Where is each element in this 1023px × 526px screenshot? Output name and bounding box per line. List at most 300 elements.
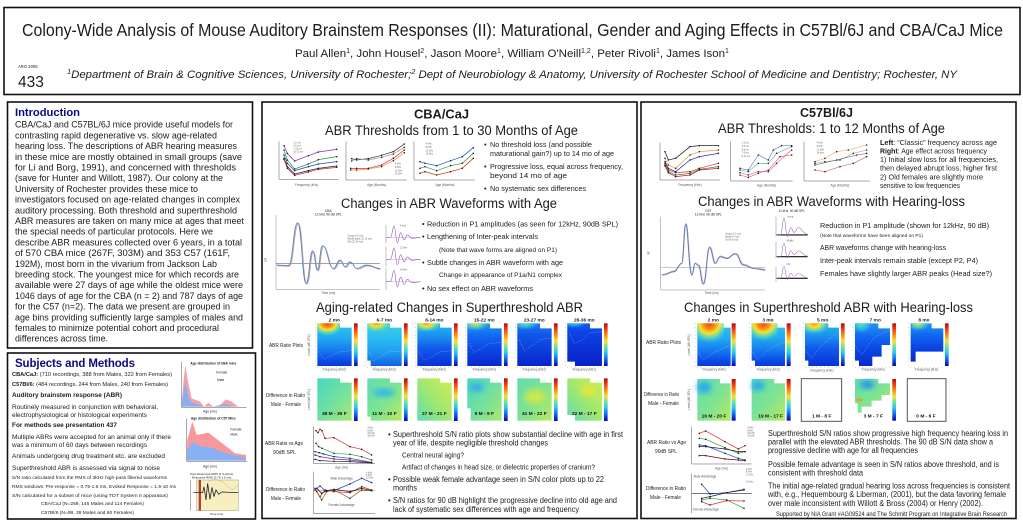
chart: ABR ratio vs age: 8 kHz xyxy=(367,430,374,432)
text block: methods: C57Bl/6: (484 recordings, 244 from Males, 240 from Females) xyxy=(12,382,168,388)
heatmaps: CBA difference plots: Level (dB SPL) xyxy=(307,389,311,410)
row labels: C57: Difference in Ratio xyxy=(646,486,686,492)
row labels: C57 xyxy=(644,340,686,501)
heatmap: 8 mo: 8 mo xyxy=(918,317,930,323)
poster label: ARO 2005 xyxy=(18,64,38,69)
difference plot: 27 M - 21 F xyxy=(417,378,458,421)
chart: threshold by age, males: 7-8 mo xyxy=(742,153,750,155)
text block: introduction xyxy=(15,119,244,344)
text block: introduction: contrasting rapid degenerative vs. slow age-related xyxy=(15,129,217,140)
chart: age distribution of C57 mice: Male xyxy=(230,432,238,436)
text block: threshold notes: maturational gain?) up to 14 mo of age xyxy=(490,149,614,158)
text block: threshold notes: • xyxy=(484,140,487,149)
heatmap: 28-36 mo: 28-36 mo xyxy=(574,317,595,323)
chart: main waveform: Time (ms) xyxy=(321,291,335,295)
chart: threshold by age, high: 4 kHz xyxy=(426,144,432,146)
text block: waveform notes: • xyxy=(422,220,425,229)
chart: difference in ratio vs age xyxy=(692,469,754,513)
heatmap: 2 mo xyxy=(695,317,736,372)
chart: threshold by frequency xyxy=(660,143,720,187)
text block: methods: was a minimum of 60 days between recordings xyxy=(11,442,147,449)
heatmap: 15-22 mo xyxy=(466,317,508,372)
chart: threshold by age, males xyxy=(731,142,793,188)
text block: superthreshold notes: year of life, despite negligible threshold changes xyxy=(393,438,548,448)
text block: methods: electrophysiological or histological experiments xyxy=(12,412,147,419)
text block: introduction: (save for Hunter and Willott, 1987). Our colony at the xyxy=(15,172,223,183)
panel: subjects and methods xyxy=(8,353,256,519)
chart: difference in ratio vs age: 4 kHz xyxy=(366,472,373,474)
heatmap: 2 mo: 2 mo xyxy=(708,317,719,323)
chart: difference in ratio vs age: 8 kHz xyxy=(746,472,753,474)
chart: difference in ratio vs age: Male Advantage xyxy=(694,475,717,479)
chart: ABR ratio vs age: 8 kHz xyxy=(747,430,754,432)
difference plot: 22 M - 17 F xyxy=(567,378,608,421)
chart: threshold by age, females xyxy=(804,142,870,188)
difference plot: 9 M - 9 F: 9 M - 9 F xyxy=(475,411,494,417)
heatmaps: C57 ratio plots: Level (dB SPL) xyxy=(687,334,691,356)
row labels: CBA: ABR Ratio vs Age xyxy=(265,441,303,447)
chart: RMS window waveform: Pure Response RMS (1.5-10ms) xyxy=(190,472,233,476)
heatmaps: CBA ratio plots: Level (dB SPL) xyxy=(307,334,311,356)
difference plot: 11 M - 10 F: 11 M - 10 F xyxy=(372,411,397,417)
row labels: CBA: Difference in Ratio xyxy=(266,393,305,399)
difference plot: 41 M - 22 F xyxy=(517,378,558,421)
heatmap: 6-7 mo: Frequency (kHz) xyxy=(373,368,396,372)
text block: superthreshold notes: Central neural aging? xyxy=(402,452,464,460)
difference plot: 11 M - 10 F xyxy=(367,378,408,421)
chart: age distribution of CBA mice xyxy=(182,361,247,414)
heatmap: 23-27 mo: 23-27 mo xyxy=(524,317,545,323)
chart: RMS window waveform xyxy=(190,472,238,516)
text block: methods xyxy=(11,372,177,516)
heatmaps: CBA difference plots xyxy=(307,378,608,421)
text block: threshold notes xyxy=(484,140,623,193)
chart: age distribution of C57 mice: Female xyxy=(230,428,242,432)
chart: threshold by age, males: 1-2 mo xyxy=(742,143,750,145)
chart: threshold by age, high: 16 kHz xyxy=(426,154,434,156)
chart: threshold by age, low: 16 kHz xyxy=(395,174,403,176)
heading: C57Bl/6J: C57Bl/6J xyxy=(800,106,853,120)
text block: methods: C57Bl/6 (N=99, 39 Males and 60 Females) xyxy=(41,510,134,516)
text block: superthreshold notes xyxy=(388,430,624,514)
chart: age distribution of CBA mice: Female xyxy=(216,370,227,374)
chart: ABR ratio vs age xyxy=(313,427,375,469)
chart: threshold by age, low: 12 kHz xyxy=(395,170,403,172)
heatmap: 2 mo: 2 mo xyxy=(329,317,340,323)
text block: superthreshold notes: Possible female advantage is seen in S/N ratios above threshold, and is xyxy=(768,460,999,469)
difference plot: 19 M - 17 F xyxy=(751,379,791,421)
difference plot: 1 M - 8 F xyxy=(801,379,842,421)
chart: threshold by age, females: 8 kHz xyxy=(817,146,823,148)
chart: difference in ratio vs age: Male Advantage xyxy=(330,476,353,480)
authors: 1 xyxy=(346,48,350,55)
text block: introduction: breeding stock. The youngest mice for which records are xyxy=(15,268,239,280)
text block: introduction: females to minimize potential cohort and procedural xyxy=(15,322,219,333)
heatmaps: C57 ratio plots xyxy=(687,317,949,372)
text block: methods: Routinely measured in conjunction with behavioral, xyxy=(12,404,158,411)
chart: main waveform xyxy=(264,209,381,295)
difference plot: 38 M - 35 F: 38 M - 35 F xyxy=(322,411,347,417)
text block: superthreshold notes: • xyxy=(388,496,391,505)
text block: introduction: describe ABR measures collected over 6 years, in a total xyxy=(15,236,242,247)
chart: ABR ratio vs age: 16 kHz xyxy=(367,436,375,438)
text block: methods: For methods see presentation 437 xyxy=(12,422,117,429)
text block: methods: S/N calculated for a subset of mice (using TDT System II apparatus) xyxy=(12,493,168,499)
row labels: C57: Male - Female xyxy=(650,495,681,501)
heatmap: 8-14 mo xyxy=(416,317,458,372)
text block: threshold notes: • xyxy=(484,184,487,193)
chart: threshold by age, females: Age (Months) xyxy=(831,184,849,188)
row labels: CBA: Male - Female xyxy=(271,496,301,502)
row labels: CBA: ABR Ratio Plots xyxy=(269,343,303,349)
heatmaps: C57 difference plots xyxy=(687,379,946,421)
chart: main waveform: Time (ms) xyxy=(705,291,719,295)
chart: ABR ratio vs age: 12 kHz xyxy=(747,433,755,435)
chart: difference in ratio vs age: 4 kHz xyxy=(746,469,753,471)
heatmap: 6-7 mo: 6-7 mo xyxy=(377,317,392,323)
heatmap: 8 mo xyxy=(909,317,949,372)
text block: threshold notes: No systematic sex differences xyxy=(490,184,586,193)
text block: waveform notes: (Note that waveforms have been aligned on P1) xyxy=(820,233,923,238)
difference plot: 16 M - 20 F: 16 M - 20 F xyxy=(702,414,726,420)
text block: waveform notes: ABR waveforms change with hearing-loss xyxy=(820,243,946,252)
chart: threshold by age, females: 12 kHz xyxy=(817,149,825,151)
text block: superthreshold notes: months xyxy=(393,484,417,492)
authors: 1 xyxy=(497,48,501,55)
text block: introduction: in these mice are mostly obtained in small groups (save xyxy=(15,151,242,162)
difference plot: 3 M - 7 F: 3 M - 7 F xyxy=(864,414,883,420)
text block: introduction: differences across time. xyxy=(15,333,108,344)
row labels: CBA: 90dB SPL xyxy=(273,450,296,456)
text block: superthreshold notes: The initial age-related gradual hearing loss across frequencies is consistent xyxy=(768,482,1011,490)
heatmap: 15-22 mo: Frequency (kHz) xyxy=(473,368,496,372)
heatmap: 8-14 mo: 8-14 mo xyxy=(425,317,443,323)
chart: age distribution of CBA mice: Age (mo) xyxy=(203,410,217,414)
chart: small waveforms xyxy=(386,225,421,290)
heatmap: 5 mo xyxy=(803,317,845,372)
chart: age distribution of C57 mice: Age distribution of C57 Mice xyxy=(191,416,236,420)
text block: waveform notes: Change in appearance of P1a/N1 complex xyxy=(439,272,563,279)
chart: main waveform xyxy=(646,209,766,295)
heatmap: 3 mo xyxy=(750,317,791,372)
chart: threshold by age, low: Age (Months) xyxy=(367,183,386,187)
text block: methods: CBA/CaJ (N=259, 145 Males and 114 Females) xyxy=(41,501,144,507)
text block: superthreshold notes: lack of systematic sex differences with age and frequency xyxy=(393,505,579,514)
text block: introduction: auditory processing. Both threshold and superthreshold xyxy=(15,204,237,215)
chart: age distribution of CBA mice: Male xyxy=(217,378,224,382)
chart: age distribution of C57 mice: Age (mo) xyxy=(203,465,217,469)
authors: , William O'Neill xyxy=(501,48,581,60)
chart: main waveform: 12 kHz 90 dB SPL xyxy=(695,213,722,217)
difference plot: 16 M - 20 F xyxy=(697,379,736,421)
affiliations: 2 xyxy=(410,69,415,76)
row labels: C57: ABR Ratio Plots xyxy=(646,340,681,346)
text block: waveform notes: • xyxy=(422,232,425,241)
heatmap: 7 mo: Frequency (kHz) xyxy=(862,368,885,372)
text block: introduction: hearing loss. The descriptions of ABR hearing measures xyxy=(15,140,237,151)
text block: superthreshold notes: Possible weak female advantage seen in S/N color plots up to 22 xyxy=(393,475,604,484)
chart: threshold by age, females: 16 kHz xyxy=(817,153,825,155)
chart: age distribution of CBA mice: Age distribution of CBA mice xyxy=(190,361,237,365)
text block: superthreshold notes: consistent with threshold data xyxy=(768,468,864,478)
header panel xyxy=(4,8,1020,94)
poster number: 433 xyxy=(18,74,44,91)
text block: waveform notes: • xyxy=(422,258,425,267)
text block: introduction: of 570 CBA mice (267F, 303M) and 353 C57 (161F, xyxy=(15,247,230,258)
chart: difference in ratio vs age: Female Advantage xyxy=(328,503,355,507)
chart: RMS window waveform: Time (ms) xyxy=(210,512,223,516)
text block: threshold notes: beyond 14 mo of age xyxy=(490,171,567,180)
text block: methods: CBA/CaJ: (710 recordings, 388 from Males, 322 from Females) xyxy=(12,372,172,378)
chart: main waveform: 12 kHz 90 dB SPL xyxy=(315,213,342,217)
chart: main waveform: C57 xyxy=(705,209,712,213)
text block: threshold notes: Progressive loss, equal across frequency, xyxy=(490,162,623,171)
acknowledgement: Supported by NIA Grant #AG09524 and The Schmitt Program on Integrative Brain Research xyxy=(776,512,1007,518)
chart: small waveforms: 12 kHz, 90 dB SPL xyxy=(778,209,805,213)
chart: threshold by age, low: 8 kHz xyxy=(395,167,402,169)
text block: threshold notes: 2) Old females are slightly more xyxy=(880,172,983,182)
authors: , Jason Moore xyxy=(424,48,497,60)
chart: threshold by frequency xyxy=(279,142,338,187)
text block: methods: Auditory brainstem response (ABR) xyxy=(12,392,122,399)
chart: threshold by frequency: Frequency (kHz) xyxy=(295,183,318,187)
text block: introduction: University of Rochester provides these mice to xyxy=(15,183,198,194)
chart: threshold by age, high: 8 kHz xyxy=(426,147,432,149)
difference plot: 38 M - 35 F xyxy=(317,378,358,421)
row labels: C57: ABR Ratio vs Age xyxy=(647,440,686,446)
chart: difference in ratio vs age: Female Advantage xyxy=(693,508,719,512)
text block: methods: S/N ratio calculated from the RMS of 3kHz high-pass filtered waveforms xyxy=(12,475,168,481)
heatmap: 8 mo: Frequency (kHz) xyxy=(915,368,938,372)
chart: ABR ratio vs age: 4 kHz xyxy=(367,428,374,430)
text block: waveform notes xyxy=(422,220,618,293)
heatmap: 3 mo: Frequency (kHz) xyxy=(757,368,780,372)
chart: ABR ratio vs age: 4 kHz xyxy=(747,428,754,430)
text block: superthreshold notes: with, e.g., Hequembourg & Liberman, (2001), but the data favoring female xyxy=(767,490,1006,499)
chart: threshold by age, males: 5-6 mo xyxy=(742,149,750,151)
heatmap: 15-22 mo: 15-22 mo xyxy=(474,317,495,323)
chart: age distribution of C57 mice xyxy=(187,416,247,469)
text block: threshold notes: Left: “Classic” frequency across age xyxy=(880,138,997,147)
heatmap: 2 mo xyxy=(316,317,358,372)
text block: threshold notes: No threshold loss (and possible xyxy=(490,140,592,149)
heading: aging-related changes: Aging-related Changes in Superthreshold ABR xyxy=(316,300,583,316)
authors: , John Housel xyxy=(350,48,420,60)
authors: , Peter Rivoli xyxy=(591,48,656,60)
affiliations: Department of Brain & Cognitive Sciences, University of Rochester; xyxy=(71,69,411,81)
chart: threshold by age, high: 12 kHz xyxy=(426,150,434,152)
difference plot: 9 M - 9 F xyxy=(467,378,508,421)
chart: main waveform: Middle aged (11-16 mo) xyxy=(347,239,372,241)
row labels: CBA: Male - Female xyxy=(271,402,301,408)
chart: small waveforms: 24 kHz xyxy=(400,270,408,272)
text block: introduction: the special needs of particular protocols. Here we xyxy=(15,226,213,237)
panel: CBA/CaJ xyxy=(262,102,637,518)
heatmap: 5 mo: Frequency (kHz) xyxy=(810,368,834,372)
chart: threshold by age, low xyxy=(346,142,407,187)
chart: threshold by age, high xyxy=(414,142,475,187)
text block: threshold notes: • xyxy=(484,162,487,171)
text block: superthreshold notes: progressive decline with age for all frequencies xyxy=(768,446,918,455)
chart: small waveforms: Young xyxy=(787,216,794,218)
heading: ABR thresholds: ABR Thresholds from 1 to 30 Months of Age xyxy=(325,123,578,139)
chart: difference in ratio vs age: 12 kHz xyxy=(366,478,374,480)
text block: introduction: age bins providing sufficiently large samples of males and xyxy=(15,311,243,322)
difference plot: 1 M - 8 F: 1 M - 8 F xyxy=(812,414,831,420)
text block: waveform notes: Females have slightly larger ABR peaks (Head size?) xyxy=(820,269,992,278)
chart: small waveforms: Old xyxy=(787,264,791,266)
text block: superthreshold notes: • xyxy=(388,430,391,439)
chart: threshold by frequency: 1-2 mo xyxy=(293,143,301,145)
chart: ABR ratio vs age xyxy=(692,427,755,470)
difference plot: 22 M - 17 F: 22 M - 17 F xyxy=(572,411,597,417)
chart: threshold by frequency: 7-12 mo xyxy=(293,149,303,151)
text block: superthreshold notes: Superthreshold S/N ratios show progressive high frequency hearing loss in xyxy=(768,429,1008,438)
chart: main waveform: Old (22-30 mo) xyxy=(347,242,363,244)
chart: ABR ratio vs age: 12 kHz xyxy=(367,433,375,435)
chart: difference in ratio vs age xyxy=(313,472,375,513)
panel: C57Bl/6J xyxy=(641,102,1016,518)
affiliations: Dept of Neurobiology & Anatomy, University of Rochester School of Medicine and Dentistry; Rochester, NY xyxy=(415,69,958,81)
heading: superthreshold with hearing-loss: Changes in Superthreshold ABR with Hearing-loss xyxy=(684,299,973,315)
heatmap: 3 mo: 3 mo xyxy=(762,317,774,323)
chart: small waveforms: 12 kHz xyxy=(400,247,408,249)
chart: threshold by age, high: Age (Months) xyxy=(436,183,454,187)
text block: introduction: ABR measures are taken on many mice at ages that meet xyxy=(15,215,244,226)
text block: waveform notes: No sex effect on ABR waveforms xyxy=(427,284,533,293)
chart: main waveform: CBA xyxy=(325,209,333,213)
chart: ABR ratio vs age: 16 kHz xyxy=(747,436,755,438)
authors: 2 xyxy=(420,48,424,55)
chart: threshold by age, females: 4 kHz xyxy=(817,143,823,145)
heatmap: 7 mo: 7 mo xyxy=(870,317,881,323)
text block: methods: RMS windows: Pre-response = 0.75-1.5 ms, Evoked Response = 1.5-10 ms xyxy=(12,484,177,490)
chart: threshold by age, males: Age (Months) xyxy=(757,184,776,188)
row labels: CBA: Difference in Ratio xyxy=(266,487,305,493)
text block: waveform notes: Reduction in P1 amplitudes (as seen for 12kHz, 90dB SPL) xyxy=(427,220,618,229)
chart: main waveform: Young (2-6 mo) xyxy=(347,236,364,238)
authors: 1,2 xyxy=(581,48,591,55)
chart: small waveforms xyxy=(776,209,808,282)
chart: small waveforms: Middle xyxy=(787,241,794,243)
text block: waveform notes: Lengthening of Inter-peak intervals xyxy=(427,232,538,241)
row labels: C57: Male - Female xyxy=(648,401,679,407)
text block: introduction: investigators focused on age-related changes in complex xyxy=(15,194,240,205)
chart: ABR ratio vs age: Age (mo) xyxy=(335,465,348,469)
difference plot: 3 M - 7 F xyxy=(855,379,896,421)
heatmap: 7 mo xyxy=(853,317,896,372)
heatmap: 5 mo: 5 mo xyxy=(817,317,828,323)
text block: introduction: 192M), most born in the vivarium from Jackson Lab xyxy=(15,258,217,269)
text block: superthreshold notes: S/N ratios for 90 dB highlight the progressive decline into old age and xyxy=(393,496,617,505)
chart: threshold by frequency: 15-22 mo xyxy=(293,152,304,154)
difference plot: 19 M - 17 F: 19 M - 17 F xyxy=(758,414,783,420)
text block: superthreshold notes: parallel with the elevated ABR thresholds. The 90 dB S/N data show a xyxy=(768,438,994,446)
text block: introduction: available were 27 days of age while the oldest mice were xyxy=(15,279,243,290)
difference plot: 0 M - 6 F xyxy=(907,379,946,421)
heading: waveforms with hearing-loss: Changes in ABR Waveforms with Hearing-loss xyxy=(698,193,965,209)
chart: main waveform: uV xyxy=(646,251,650,255)
affiliations: 1 xyxy=(67,69,71,76)
chart: difference in ratio vs age: 12 kHz xyxy=(746,474,754,476)
text block: introduction: for the C57 (n=2). The data we present are grouped in xyxy=(15,301,230,312)
heatmaps: C57 difference plots: Level (dB SPL) xyxy=(687,389,691,410)
difference plot: 0 M - 6 F: 0 M - 6 F xyxy=(916,414,936,420)
text block: introduction: for Li and Borg, 1991), and concerned with thresholds xyxy=(15,162,236,172)
heading: introduction: Introduction xyxy=(15,107,80,119)
heading: CBA/CaJ: CBA/CaJ xyxy=(414,108,469,122)
chart: threshold by age, low: 4 kHz xyxy=(395,164,402,166)
heatmap: 6-7 mo xyxy=(366,317,408,372)
heading: ABR thresholds: ABR Thresholds: 1 to 12 Months of Age xyxy=(718,121,945,136)
text block: superthreshold notes xyxy=(767,429,1011,508)
text block: waveform notes: Subtle changes in ABR waveform with age xyxy=(427,258,563,267)
row labels: C57: Difference in Ratio xyxy=(644,392,679,398)
text block: waveform notes xyxy=(820,221,992,278)
text block: threshold notes: sensitive to low frequencies xyxy=(880,181,960,190)
text block: methods: Superthreshold ABR is assessed via signal to noise xyxy=(12,465,160,472)
text block: superthreshold notes: Superthreshold S/N ratio plots show substantial decline with age in first xyxy=(393,430,624,439)
heading: subjects and methods: Subjects and Methods xyxy=(15,358,135,370)
authors: 1 xyxy=(656,48,660,55)
text block: superthreshold notes: over male inconsistent with Willott & Bross (2004) or Henry (2002). xyxy=(768,499,983,508)
chart: small waveforms: 4 kHz xyxy=(400,226,407,228)
text block: threshold notes: 1) Initial slow loss for all frequencies, xyxy=(880,155,998,164)
chart: difference in ratio vs age: 16 kHz xyxy=(746,481,754,483)
authors: Paul Allen xyxy=(295,48,346,60)
text block: introduction: 1046 days of age for the CBA (n = 2) and 787 days of age xyxy=(15,290,243,301)
text block: threshold notes xyxy=(880,138,998,190)
chart: main waveform: Young (1-2 mo) xyxy=(725,233,741,235)
chart: main waveform: Middle (4 mo) xyxy=(725,236,739,238)
text block: superthreshold notes: • xyxy=(388,475,391,484)
heading: waveforms with age: Changes in ABR Waveforms with Age xyxy=(341,196,557,212)
row labels: CBA xyxy=(265,343,305,502)
text block: superthreshold notes: Artifact of changes in head size, or dielectric properties of cranium? xyxy=(402,464,595,472)
text block: threshold notes: Right: Age effect across frequency xyxy=(880,146,987,156)
text block: methods: Multiple ABRs were accepted for an animal only if there xyxy=(12,434,171,441)
text block: methods: Animals undergoing drug treatment etc. are excluded xyxy=(12,453,165,460)
heatmap: 2 mo: Frequency (kHz) xyxy=(323,368,346,372)
heatmap: 23-27 mo: Frequency (kHz) xyxy=(523,368,546,372)
text block: waveform notes: Inter-peak intervals remain stable (except P2, P4) xyxy=(820,256,978,265)
chart: threshold by frequency: 3-6 mo xyxy=(293,146,301,148)
text block: waveform notes: Reduction in P1 amplitude (shown for 12kHz, 90 dB) xyxy=(820,221,989,230)
text block: threshold notes: then delayed abrupt loss, higher first xyxy=(880,164,998,172)
chart: RMS window waveform: Response RMS (0.75-1.5 ms) xyxy=(192,476,231,480)
text block: waveform notes: • xyxy=(422,284,425,293)
difference plot: 27 M - 21 F: 27 M - 21 F xyxy=(422,411,447,417)
panel: introduction xyxy=(8,102,252,348)
heatmap: 8-14 mo: Frequency (kHz) xyxy=(423,368,446,372)
text block: waveform notes: (Note that wave forms are aligned on P1) xyxy=(439,247,557,254)
chart: main waveform: Old (6-9 mo) xyxy=(725,239,738,241)
chart: difference in ratio vs age: 8 kHz xyxy=(366,475,373,477)
chart: ABR ratio vs age: Age (mo) xyxy=(715,466,728,470)
text block: introduction: CBA/CaJ and C57BL/6J mice provide useful models for xyxy=(15,119,233,130)
chart: threshold by age, males: 9-12 mo xyxy=(742,156,751,158)
authors: 1 xyxy=(725,48,729,55)
chart: threshold by age, males: 3-4 mo xyxy=(742,146,750,148)
heatmap: 28-36 mo xyxy=(566,317,608,372)
row labels: C57: 90dB SPL xyxy=(655,449,677,455)
chart: main waveform: uV xyxy=(264,257,268,262)
chart: threshold by frequency: Frequency (kHz) xyxy=(678,183,702,187)
authors: , James Ison xyxy=(660,48,725,60)
difference plot: 41 M - 22 F: 41 M - 22 F xyxy=(522,411,547,417)
heatmap: 23-27 mo xyxy=(516,317,558,372)
heatmaps: CBA ratio plots xyxy=(307,317,608,372)
